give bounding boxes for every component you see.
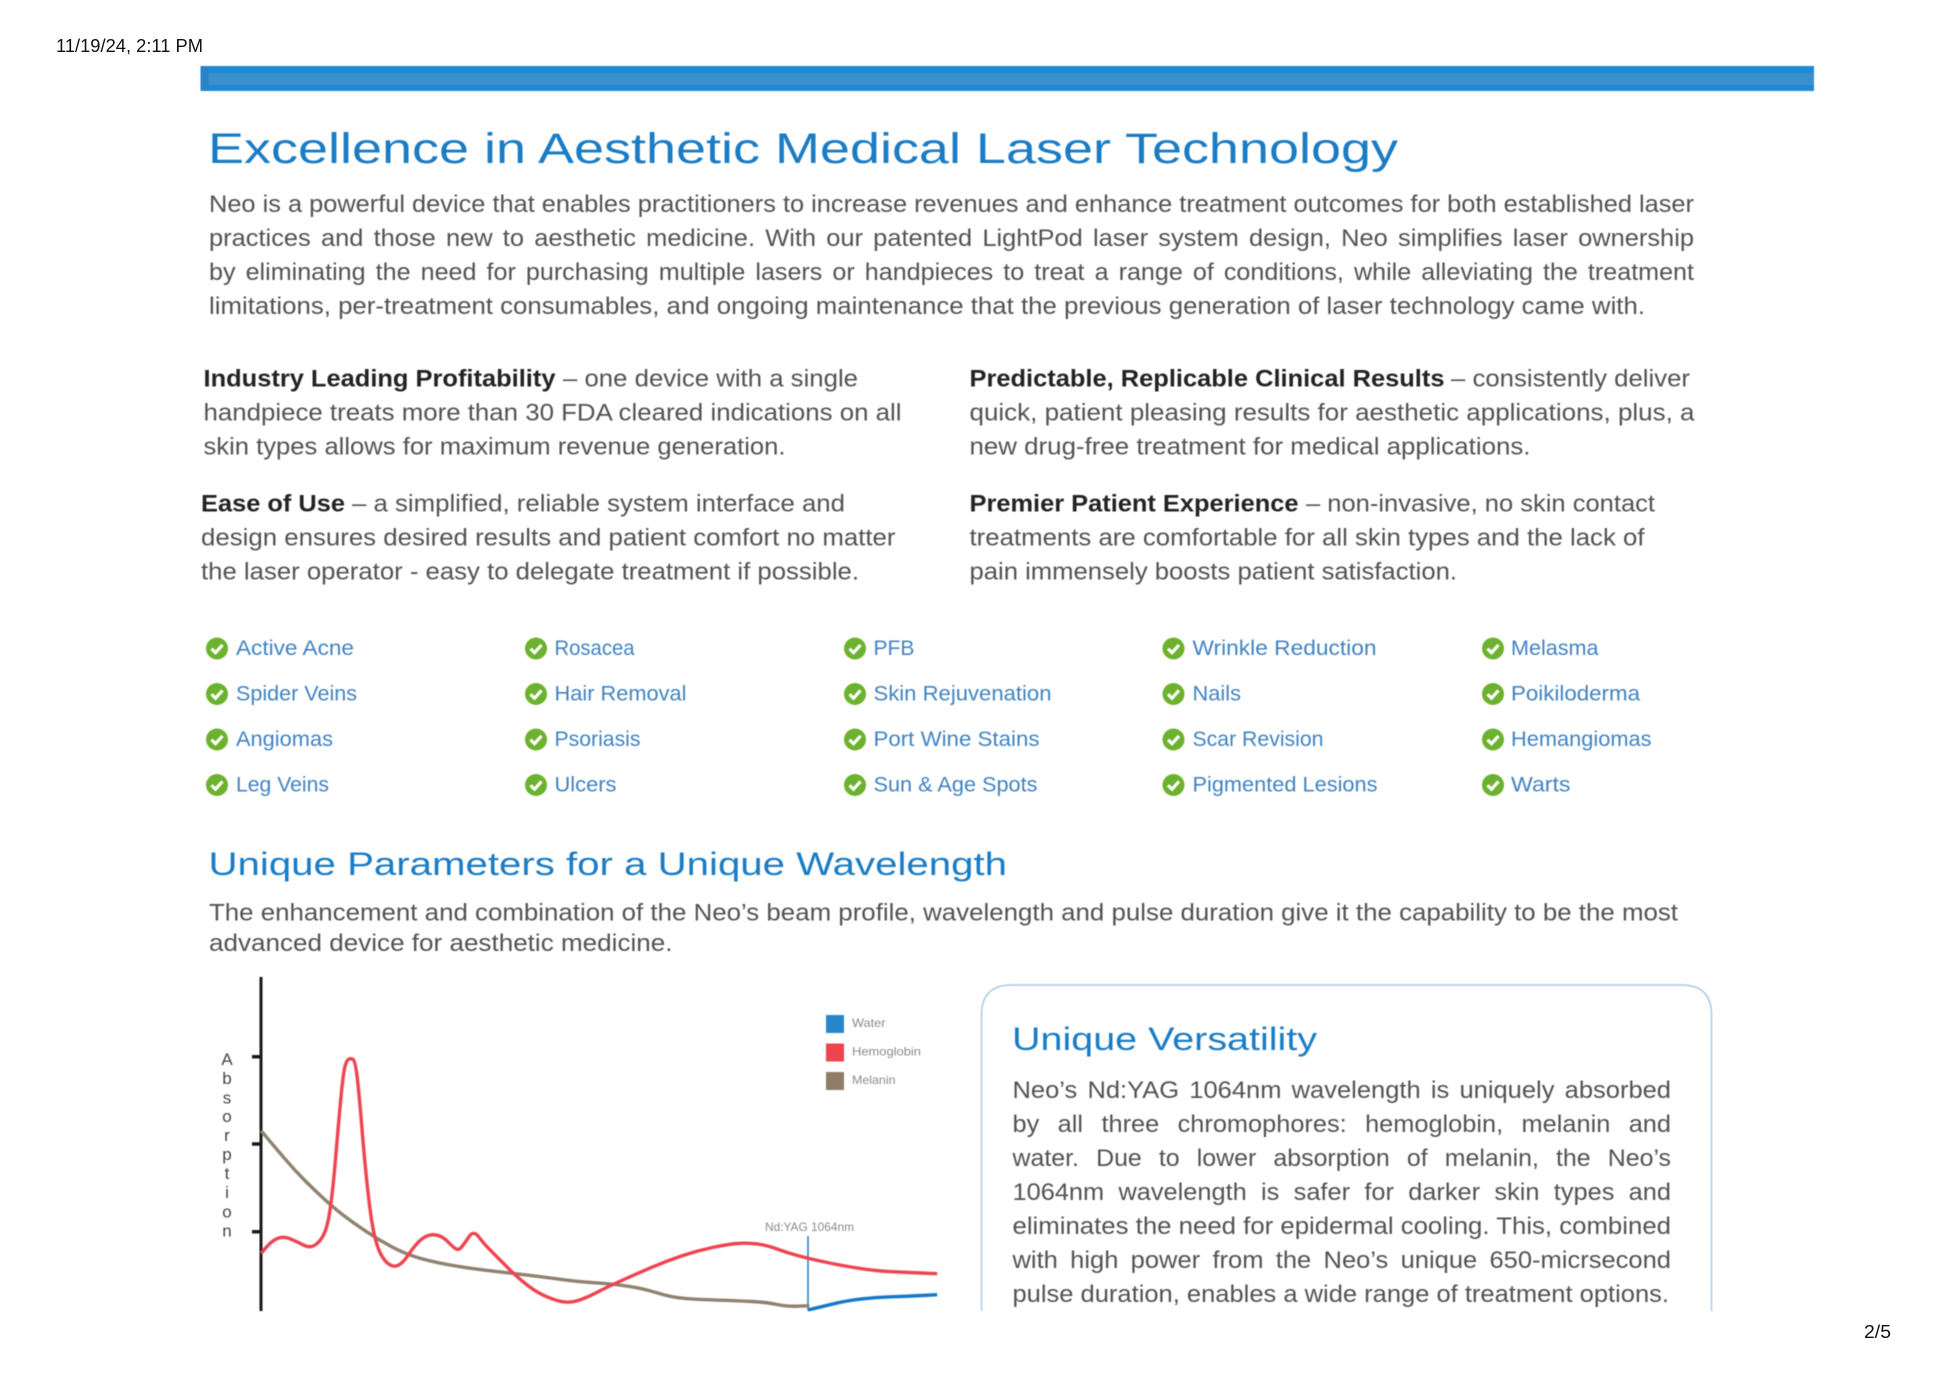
checklist column 5: Warts (1511, 774, 1570, 796)
checklist column 2: Ulcers (554, 774, 616, 796)
panel text: 1064nm wavelength is safer for darker skin types and (1012, 1179, 1671, 1206)
panel: Unique Versatility (982, 985, 1712, 1311)
checklist column 3: PFB (874, 637, 914, 660)
feature: Industry Leading Profitability (204, 366, 902, 460)
intro paragraph (209, 191, 1694, 320)
absorption chart (221, 977, 937, 1311)
hemoglobin curve (261, 1059, 937, 1302)
wavelength marker line (807, 1236, 809, 1310)
print timestamp: 11/19/24, 2:11 PM (56, 36, 203, 56)
panel heading: Unique Versatility (1012, 1021, 1317, 1057)
feature: Premier Patient Experience (970, 490, 1655, 586)
section paragraph: advanced device for aesthetic medicine. (209, 930, 672, 957)
feature: Predictable, Replicable Clinical Results (970, 366, 1695, 460)
y axis label: Absorption: o (222, 1202, 232, 1222)
checklist column 1: Leg Veins (236, 774, 329, 796)
y axis label: Absorption: p (222, 1145, 232, 1164)
feature: Ease of Use: Ease of Use (201, 490, 345, 518)
y axis label: Absorption: b (222, 1069, 232, 1088)
checklist column 3: Skin Rejuvenation (874, 682, 1052, 706)
y axis label: Absorption: i (225, 1183, 229, 1202)
feature: Premier Patient Experience: Premier Patient Experience (970, 490, 1298, 518)
section paragraph (209, 900, 1678, 957)
feature: Industry Leading Profitability: handpiece treats more than 30 FDA cleared indications on all (204, 400, 902, 426)
checklist column 1: Angiomas (236, 728, 333, 751)
checklist column 3 (844, 637, 1052, 796)
y axis label: Absorption: t (225, 1164, 230, 1183)
section paragraph: The enhancement and combination of the Neo’s beam profile, wavelength and pulse duration give it the capability to be the most (209, 900, 1678, 926)
section heading: Unique Parameters: Unique Parameters for a Unique Wavelength (208, 846, 1007, 882)
feature: Ease of Use: the laser operator - easy to delegate treatment if possible. (201, 558, 859, 586)
feature: Ease of Use: – a simplified, reliable system interface and (352, 490, 845, 518)
checklist column 4: Pigmented Lesions (1192, 774, 1378, 796)
feature: Ease of Use (201, 490, 896, 586)
checklist column 5: Melasma (1511, 637, 1599, 660)
y axis with ticks (252, 977, 261, 1311)
panel text: pulse duration, enables a wide range of treatment options. (1012, 1281, 1669, 1308)
y axis label: Absorption: o (222, 1107, 232, 1126)
y axis label: Absorption (221, 1050, 233, 1240)
checklist column 2: Hair Removal (554, 682, 686, 706)
chart legend: Water (852, 1016, 886, 1030)
panel text (1011, 1077, 1671, 1308)
y axis label: Absorption: A (221, 1050, 233, 1069)
feature: Premier Patient Experience: pain immensely boosts patient satisfaction. (970, 558, 1457, 586)
checklist column 3: Port Wine Stains (874, 728, 1040, 751)
feature: Ease of Use: design ensures desired results and patient comfort no matter (201, 524, 896, 552)
checklist column 2: Psoriasis (554, 728, 640, 751)
y axis label: Absorption: s (223, 1088, 231, 1108)
feature: Predictable, Replicable Clinical Results: – consistently deliver (1451, 366, 1690, 392)
intro paragraph: Neo is a powerful device that enables practitioners to increase revenues and enhance treatment outcomes for both established laser (209, 191, 1694, 218)
feature: Industry Leading Profitability: Industry Leading Profitability (204, 366, 556, 392)
feature: Predictable, Replicable Clinical Results: Predictable, Replicable Clinical Results (970, 366, 1444, 392)
intro paragraph: by eliminating the need for purchasing multiple lasers or handpieces to treat a range of conditions, while alleviating the treatment (209, 259, 1694, 286)
chart legend: Melanin (852, 1073, 896, 1087)
panel text: by all three chromophores: hemoglobin, melanin and (1012, 1111, 1671, 1138)
checklist column 4 (1162, 637, 1378, 796)
panel text: Neo’s Nd:YAG 1064nm wavelength is uniquely absorbed (1012, 1077, 1671, 1104)
feature: Industry Leading Profitability: – one device with a single (563, 366, 858, 392)
panel text: eliminates the need for epidermal cooling. This, combined (1012, 1213, 1671, 1240)
y axis label: Absorption: r (224, 1126, 230, 1145)
feature: Industry Leading Profitability: skin types allows for maximum revenue generation. (204, 434, 786, 460)
checklist column 5: Hemangiomas (1511, 728, 1652, 751)
checklist column 3: Sun & Age Spots (874, 774, 1038, 796)
wavelength label: Nd:YAG 1064nm (765, 1220, 854, 1234)
checklist column 4: Nails (1192, 682, 1241, 706)
water curve (808, 1295, 937, 1310)
feature: Predictable, Replicable Clinical Results: new drug-free treatment for medical applications. (970, 434, 1530, 460)
checklist column 1: Spider Veins (236, 682, 357, 706)
checklist column 4: Scar Revision (1192, 728, 1324, 751)
panel text: with high power from the Neo’s unique 650-micrsecond (1011, 1247, 1671, 1274)
feature: Predictable, Replicable Clinical Results: quick, patient pleasing results for aesthetic applications, plus, a (970, 400, 1695, 426)
checklist column 1 (206, 637, 357, 796)
indications checklist (206, 637, 1652, 796)
feature: Premier Patient Experience: – non-invasive, no skin contact (1306, 490, 1655, 518)
panel text: water. Due to lower absorption of melanin, the Neo’s (1011, 1145, 1671, 1172)
title: Excellence in Aesthetic Medical Laser Technology (208, 125, 1399, 173)
checklist column 1: Active Acne (236, 637, 354, 660)
checklist column 4: Wrinkle Reduction (1192, 637, 1376, 660)
checklist column 5 (1482, 637, 1652, 796)
checklist column 5: Poikiloderma (1511, 682, 1640, 706)
melanin curve (261, 1131, 809, 1306)
chart legend (826, 1015, 921, 1090)
checklist column 2: Rosacea (554, 637, 635, 660)
feature: Premier Patient Experience: treatments are comfortable for all skin types and the lack of (970, 524, 1645, 552)
page content (200, 66, 1814, 1311)
y axis label: Absorption: n (222, 1222, 232, 1240)
chart legend: Hemoglobin (852, 1044, 921, 1058)
intro paragraph: limitations, per-treatment consumables, and ongoing maintenance that the previous generation of laser technology came with. (209, 293, 1645, 320)
checklist column 2 (525, 637, 686, 796)
intro paragraph: practices and those new to aesthetic medicine. With our patented LightPod laser system design, Neo simplifies laser ownership (209, 225, 1694, 252)
page number: 2/5 (1864, 1322, 1891, 1342)
header bar (200, 66, 1814, 91)
